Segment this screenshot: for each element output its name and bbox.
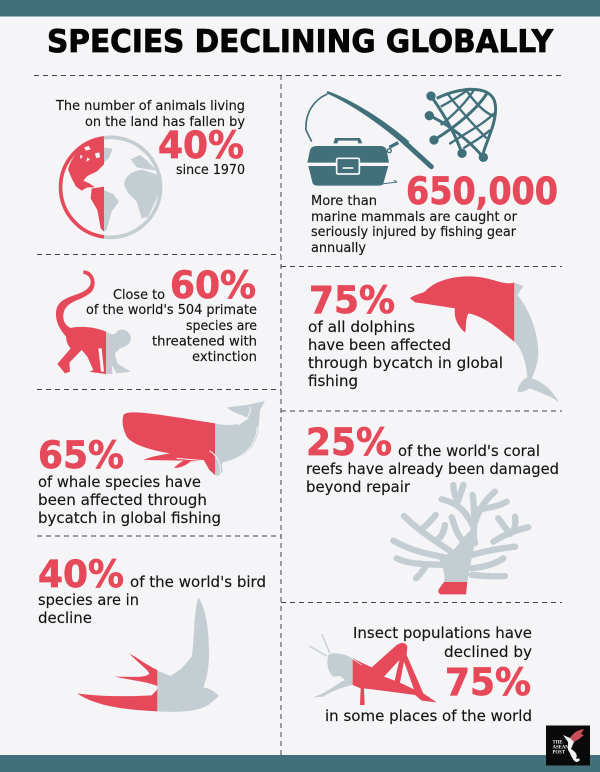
bottom bar [0,755,600,772]
text: whales description: bycatch in global fishing [38,509,221,527]
icon: fishing net [425,88,496,162]
text: primate description: of the world's 504 primate [86,302,257,318]
icon: globe [61,137,161,237]
text: marine mammals description: seriously injured by fishing gear [311,224,516,240]
panel: marine mammals [306,88,558,256]
icon: dolphin [410,276,559,402]
text: insects intro [353,624,532,661]
icon: fishing gear [306,88,496,186]
stat: 75% insects: 75% [445,661,531,704]
icon: monkey [56,270,131,374]
text: birds description: decline [38,609,92,627]
logo text [552,740,569,756]
icon: whale [123,401,265,476]
text: primate description: extinction [192,349,257,365]
text: birds description [38,573,266,627]
text: insects intro: Insect populations have [353,624,532,642]
top bar [0,0,600,16]
text: coral description: beyond repair [306,478,411,496]
stat: 25%: 25% [306,421,392,464]
panel: primates [56,264,257,374]
text: whales description [38,473,221,527]
stat: 65%: 65% [38,434,124,477]
panel: birds [38,553,266,712]
panel: insects [309,624,532,725]
icon: swallow [77,597,219,712]
text: birds description: species are in [38,591,139,609]
logo text: ASEAN [552,746,569,750]
stat: 40% birds: 40% [38,553,124,596]
logo: The ASEAN Post [546,726,590,766]
text: dolphins description: through bycatch in global [308,354,503,372]
icon: coral [393,485,528,594]
text: dolphins description: of all dolphins [308,318,415,336]
text: land animals intro [55,98,245,130]
text: insects intro: declined by [444,643,532,661]
panel: land animals [55,98,245,237]
text: marine mammals description: More than [311,193,377,209]
icon: grasshopper [309,634,437,705]
stat: 75% dolphins: 75% [309,279,395,322]
text: since 1970: since 1970 [176,162,245,178]
text: coral description [306,442,559,496]
logo bird [563,729,584,762]
text: primate description [86,302,257,365]
text: insects closing: in some places of the world [325,707,532,725]
text: coral description: of the world's coral [398,442,540,460]
text: dolphins description: fishing [308,372,358,390]
text: primate description: threatened with [152,334,257,350]
icon: fishing rod [306,91,431,167]
text: marine mammals description: marine mammals are caught or [311,209,517,225]
text: dolphins description [308,318,503,390]
stat: 60%: 60% [170,264,256,307]
text: whales description: of whale species have [38,473,201,491]
panel: dolphins [308,276,559,402]
text: land animals intro: on the land has fallen by [85,114,245,130]
text: birds description: of the world's bird [130,573,266,591]
text: whales description: been affected through [38,491,207,509]
logo text: POST [552,750,566,756]
stat: 650,000: 650,000 [406,170,558,213]
logo text: THE [552,740,563,746]
stat: 40% land: 40% [158,124,244,167]
text: primate description: species are [186,318,257,334]
text: marine mammals description: annually [311,240,366,256]
panel: whales [38,401,265,527]
text: dolphins description: have been affected [308,336,451,354]
icon: tackle box [307,138,397,186]
text: coral description: reefs have already been damaged [306,460,559,478]
text: marine mammals description [311,193,517,256]
text: close to: Close to [113,287,165,303]
title: SPECIES DECLINING GLOBALLY [47,24,554,60]
text: land animals intro: The number of animals living [55,98,245,114]
panel: coral [306,421,559,594]
